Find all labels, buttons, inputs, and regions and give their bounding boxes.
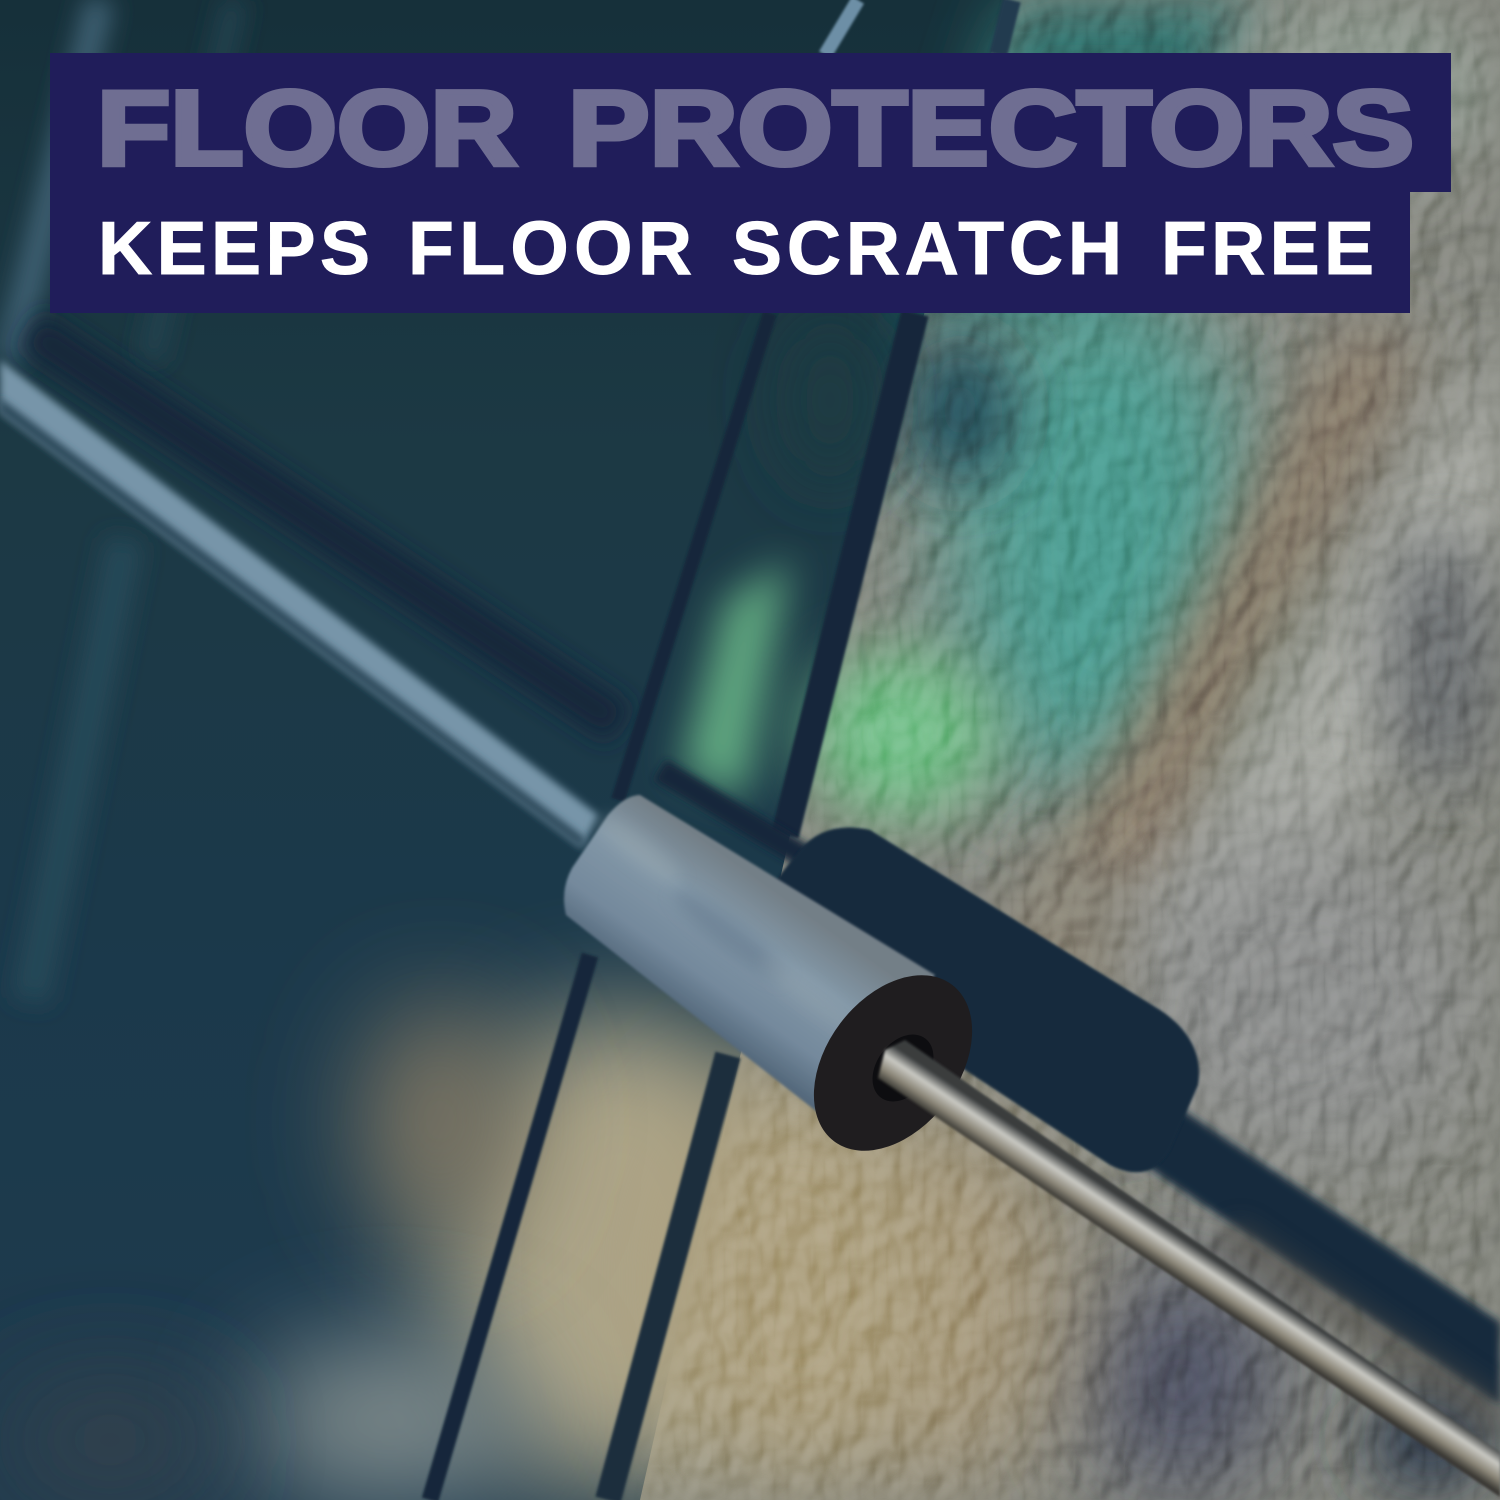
metal cylinder [564, 795, 935, 1122]
subheading: keeps floor scratch free [98, 206, 1374, 290]
lower steel rod [878, 1040, 1500, 1497]
upper rod [0, 360, 598, 848]
subheading: keeps floor scratch free: KEEPS [98, 206, 370, 290]
title banner [50, 53, 1451, 313]
glass texture [648, 0, 1500, 1500]
subheading: keeps floor scratch free: FREE [1161, 206, 1374, 290]
faint background wires [10, 0, 620, 1000]
rod shadow [1146, 1108, 1500, 1430]
heading: floor protectors [97, 70, 1414, 188]
cylinder shadow on glass [760, 828, 1199, 1172]
rubber end cap [814, 975, 972, 1151]
thin dark wires [430, 0, 1012, 1500]
subheading: keeps floor scratch free: FLOOR [408, 206, 692, 290]
heading: floor protectors: FLOOR [97, 70, 517, 188]
subheading: keeps floor scratch free: SCRATCH [732, 206, 1122, 290]
heading: floor protectors: PROTECTORS [568, 70, 1414, 188]
